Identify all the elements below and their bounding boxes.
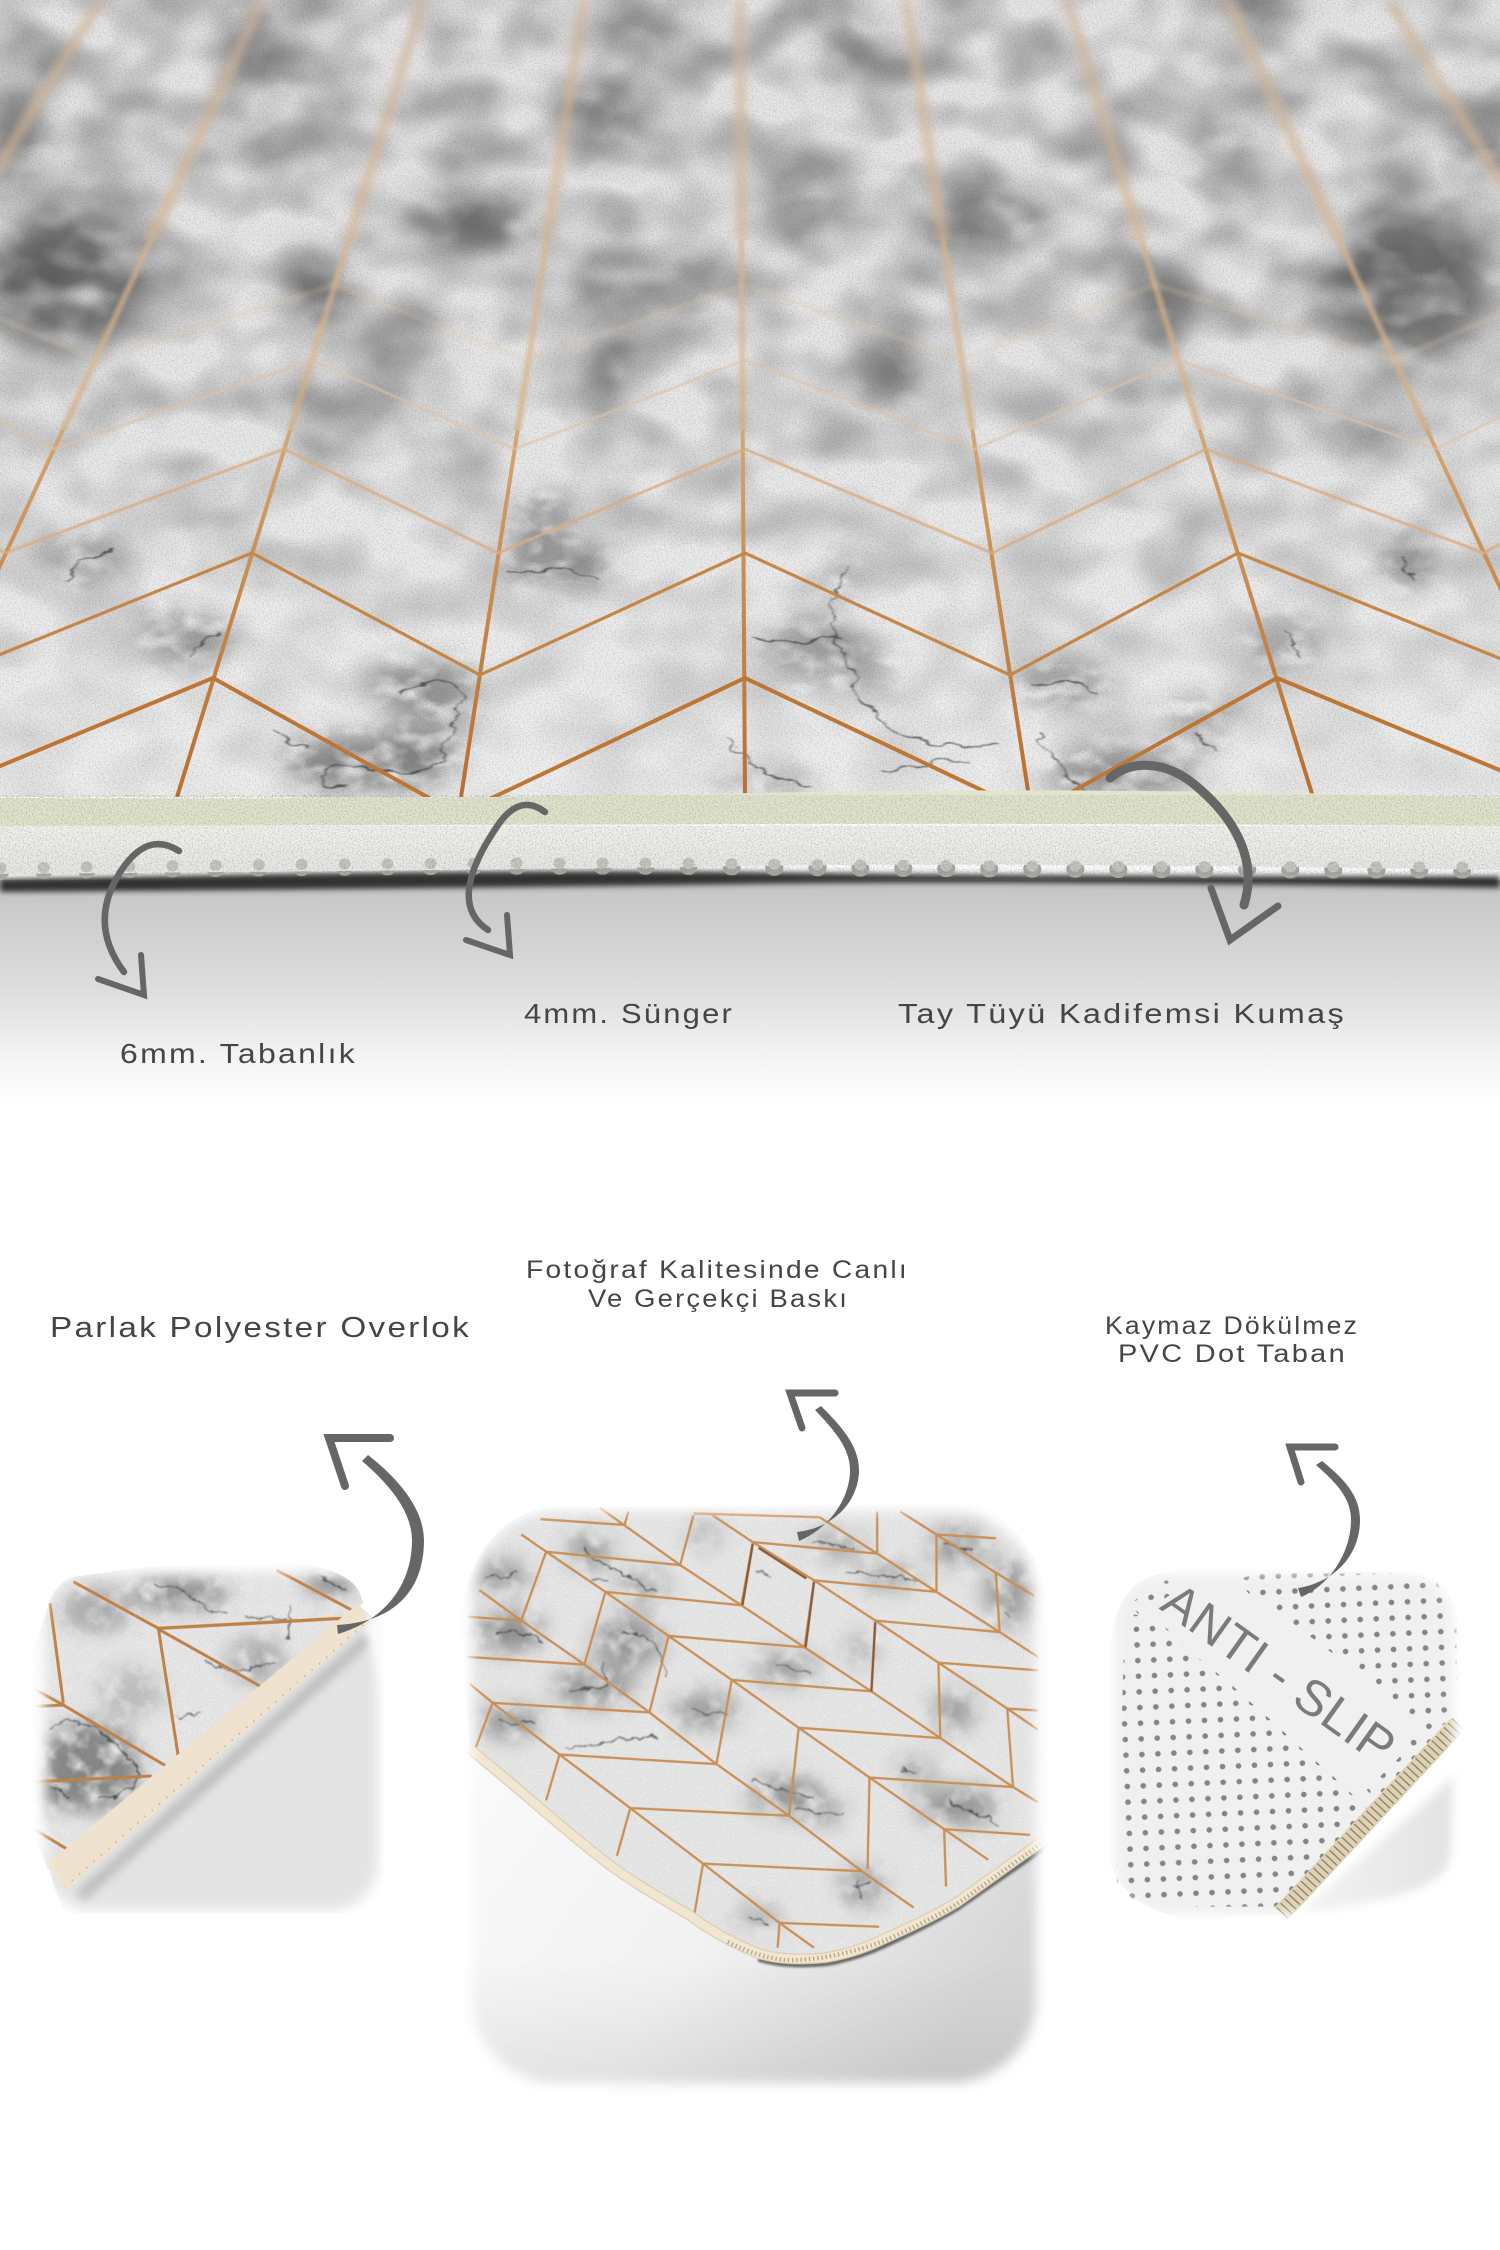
veins: [50, 1577, 347, 1797]
gold chevrons: [0, 285, 1500, 814]
label: plush fabric: Tay Tüyü Kadifemsi Kumaş: [898, 998, 1346, 1029]
label: photo quality print: [526, 1256, 909, 1313]
label: photo quality print: Ve Gerçekçi Baskı: [588, 1285, 849, 1313]
arrow: anti-slip: [1290, 1447, 1360, 1597]
rug surface: [460, 1504, 1049, 1959]
floor shadow: [1293, 1773, 1458, 1918]
marble clouds and veins: [456, 1500, 1053, 1967]
dots top left corner: [1130, 1580, 1177, 1617]
label: non-slip base: PVC Dot Taban: [1118, 1340, 1347, 1368]
arrow: photo quality: [790, 1393, 859, 1541]
arrow: plush fabric: [1110, 765, 1278, 940]
arrow: overlock: [329, 1438, 424, 1634]
blurred marble clouds near: [54, 492, 1435, 796]
binding stitches: [65, 1625, 363, 1887]
foam green layer: [0, 790, 1500, 826]
pile grain: [41, 1569, 363, 1890]
rug back surface: [1108, 1570, 1460, 1918]
gold lines: [30, 1570, 352, 1850]
long diagonals: [521, 1534, 988, 1860]
label: 4mm foam: 4mm. Sünger: [524, 998, 734, 1029]
marble clouds and veins: [38, 1567, 368, 1890]
gold lines far blurred: [0, 0, 1500, 240]
blurred marble clouds far: [0, 0, 1500, 453]
arrow: 4mm foam: [466, 805, 545, 955]
label: non-slip base: [1105, 1312, 1359, 1368]
binding outer edge: [470, 1749, 1046, 1959]
panel: overlock corner rug: [27, 1560, 393, 1913]
stitched binding: [1282, 1723, 1458, 1913]
floor shadow gradient under rug: [0, 880, 1500, 1105]
dot grid lower left: [1117, 1613, 1367, 1907]
label: 6mm base: 6mm. Tabanlık: [120, 1038, 357, 1069]
dark contact shadow: [0, 871, 1500, 892]
anti-slip lettering: ANTI - SLIP: [1152, 1572, 1406, 1775]
gold chevron lines: [468, 1508, 1038, 1948]
dotted grip bumps under edge: [0, 866, 1500, 871]
veins: [483, 1542, 1011, 1925]
marble base mottling: [0, 0, 1500, 797]
label: overlock: Parlak Polyester Overlok: [50, 1312, 471, 1344]
gold lines middle: [58, 240, 1432, 430]
fine weave noise: [0, 795, 1500, 875]
fine pile noise: [0, 0, 1500, 800]
panel: anti-slip back of rug: [1108, 1570, 1460, 1918]
binding cast shadow: [80, 1637, 370, 1897]
cream binding: [470, 1749, 1046, 1959]
darker gold segments: [742, 1544, 875, 1691]
floor shadow: [50, 1603, 383, 1913]
rug cross-section layers: [0, 790, 1500, 892]
gold lines near sharp: [0, 430, 1500, 797]
panel: rug close-up photo: [0, 0, 1500, 814]
rug surface: [30, 1563, 363, 1890]
floor shadow: [460, 1730, 1057, 2105]
marble veins: [67, 548, 1416, 796]
grip bump highlights: [0, 863, 1500, 868]
uprights: [475, 1511, 1013, 1948]
panel: photo quality rug corner: [456, 1500, 1057, 2105]
lower floor tone: [460, 1959, 1057, 2105]
label: photo quality print: Fotoğraf Kalitesinde Canlı: [526, 1256, 909, 1284]
contact shadow: [759, 1846, 1046, 1964]
binding stitches: [728, 1841, 1046, 1960]
pile grain: [456, 1500, 1053, 1967]
white fade near top right of shadow: [364, 1620, 380, 1660]
cream overlock binding: [47, 1603, 369, 1891]
plush fabric white layer: [0, 826, 1500, 874]
dot grid upper right: [1237, 1573, 1457, 1797]
label: non-slip base: Kaymaz Dökülmez: [1105, 1312, 1359, 1340]
arrow: 6mm base: [98, 844, 179, 995]
shallow returns: [468, 1513, 1038, 1927]
